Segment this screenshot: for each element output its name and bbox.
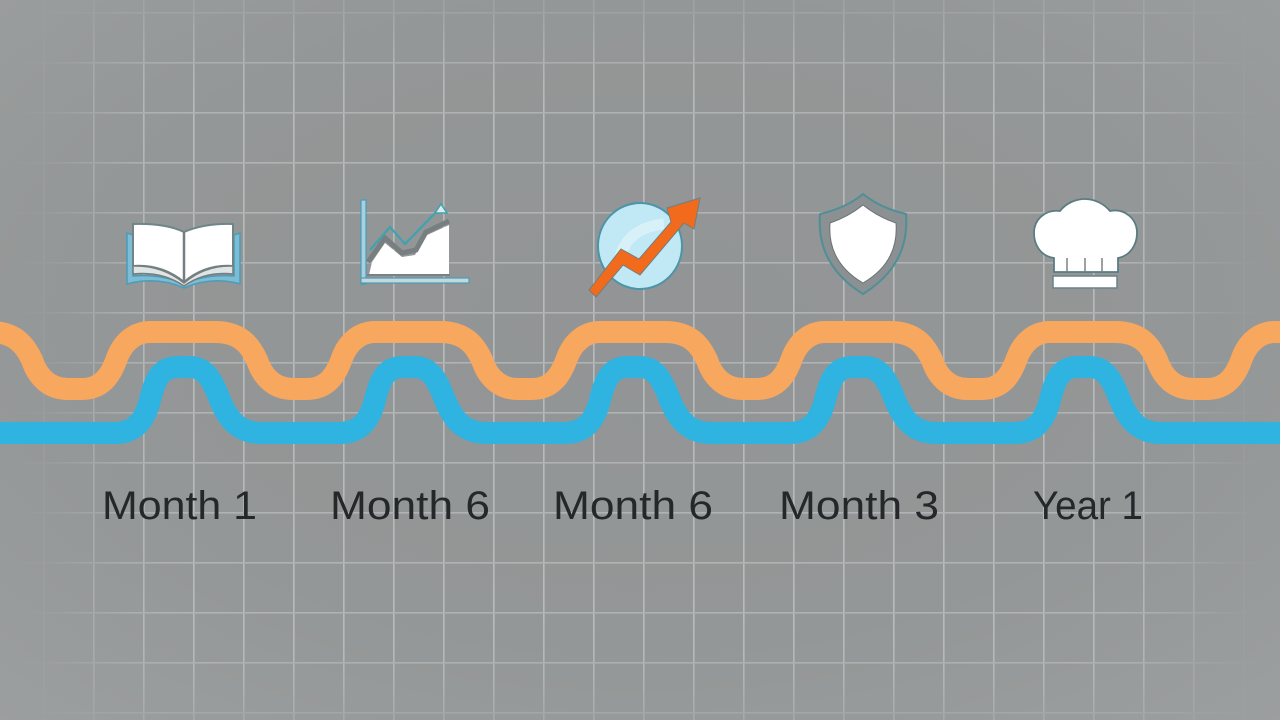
blue wavy timeline path (0, 367, 1280, 433)
icon: open book (127, 224, 240, 288)
icon: chef hat (1034, 199, 1137, 288)
label: Year 1: Year 1 (1033, 484, 1143, 528)
label: Month 6 (second): Month 6 (553, 484, 713, 528)
label: Month 6 (first): Month 6 (330, 484, 490, 528)
icon: globe with orange growth arrow (589, 198, 700, 297)
label: Month 3: Month 3 (779, 484, 939, 528)
label: Month 1: Month 1 (102, 484, 257, 528)
icon: area chart with rising line (361, 200, 469, 284)
orange wavy timeline path (0, 332, 1280, 389)
icon: shield (820, 194, 906, 294)
